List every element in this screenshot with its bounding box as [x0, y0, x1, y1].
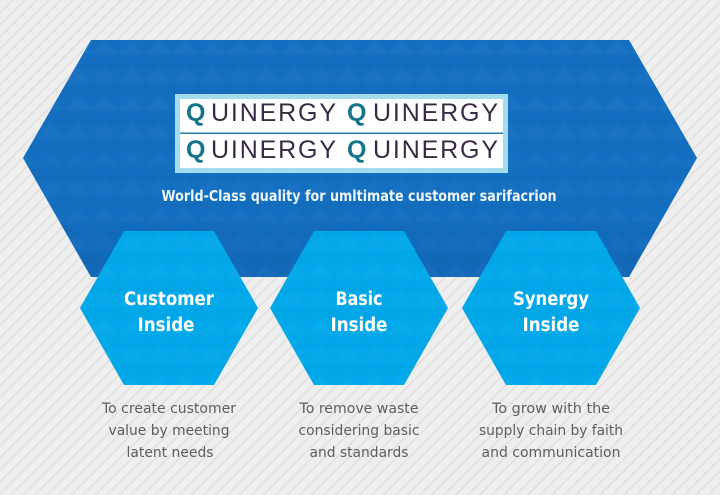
hexagon: Synergy Inside: Inside — [522, 315, 580, 336]
hexagon: Customer Inside — [80, 231, 258, 385]
description: customer: value by meeting — [108, 423, 230, 439]
hexagon: Synergy Inside — [462, 231, 640, 385]
description: customer — [101, 401, 236, 461]
description: basic: and standards — [310, 445, 408, 461]
description: synergy: supply chain by faith — [479, 423, 623, 439]
description: basic: considering basic — [298, 423, 420, 439]
logo panel: Quinergy: Q — [347, 99, 366, 127]
panel: large blue hexagon — [23, 40, 697, 277]
hexagon: Basic Inside: Inside — [330, 315, 388, 336]
logo panel: Quinergy: Q — [186, 99, 205, 127]
hexagon: Basic Inside: Basic — [336, 289, 382, 310]
description: customer: latent needs — [126, 445, 214, 461]
tagline: World-Class quality for umltimate customer sarifacrion — [162, 187, 556, 205]
description: synergy: To grow with the — [491, 401, 610, 417]
description: customer: To create customer — [101, 401, 236, 417]
description: basic — [298, 401, 420, 461]
hexagon: Customer Inside: Inside — [138, 315, 194, 336]
description: synergy: and communication — [482, 445, 620, 461]
logo panel: Quinergy: Q — [347, 136, 366, 164]
description: basic: To remove waste — [299, 401, 419, 417]
logo panel: Quinergy: UINERGY — [373, 136, 498, 164]
hexagon: Basic Inside — [270, 231, 448, 385]
logo panel: Quinergy: Q — [186, 136, 205, 164]
logo panel: Quinergy: UINERGY — [373, 99, 498, 127]
hexagon: Synergy Inside: Synergy — [513, 289, 589, 310]
description: synergy — [479, 401, 623, 461]
hexagon: Customer Inside: Customer — [124, 289, 215, 310]
logo panel: Quinergy — [175, 94, 508, 173]
logo panel: Quinergy: UINERGY — [211, 136, 336, 164]
logo panel: Quinergy: UINERGY — [211, 99, 336, 127]
